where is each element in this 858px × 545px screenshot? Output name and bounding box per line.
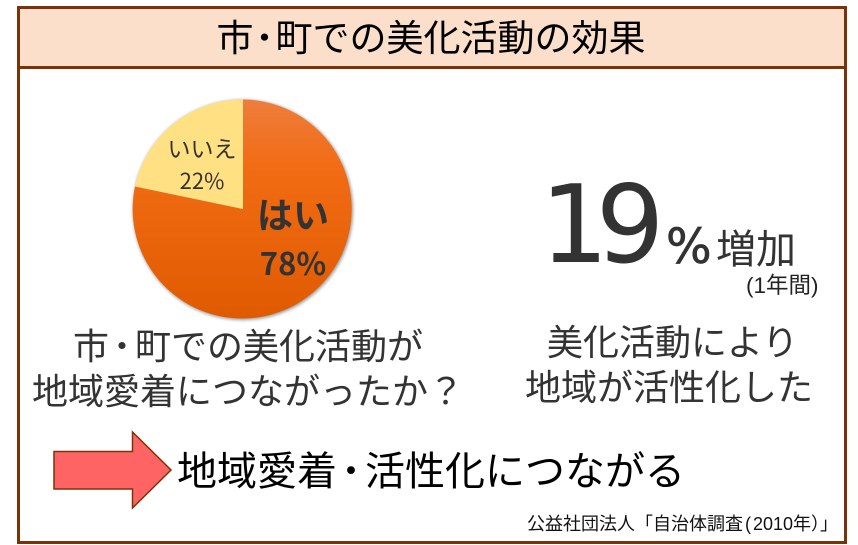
right result text: 地域が活性化した xyxy=(525,367,813,408)
left question text xyxy=(32,326,464,412)
right result text: 美化活動により xyxy=(547,322,798,363)
label: no: いいえ xyxy=(168,130,236,164)
left question text: 市 町での美化活動が xyxy=(73,326,423,367)
conclusion text: ･ xyxy=(341,450,361,494)
slice: yes 78% xyxy=(133,100,352,318)
left question text: 地域愛着につながったか？ xyxy=(32,371,464,412)
label: yes: 78% xyxy=(260,239,326,284)
conclusion text: 地域愛着 活性化につながる xyxy=(177,450,685,494)
left question text: ･ xyxy=(113,326,131,367)
source: 公益社団法人「自治体調査(2010年）」 xyxy=(527,514,838,534)
pie shadow xyxy=(133,100,353,320)
period note: (1年間) xyxy=(746,273,818,298)
label: no xyxy=(168,130,236,196)
slice: no 22% xyxy=(135,99,243,209)
header band xyxy=(17,6,847,69)
pie chart xyxy=(131,98,355,322)
number 19: 19 xyxy=(540,163,651,288)
percent increase: % xyxy=(666,219,712,275)
title: ･ xyxy=(255,18,274,59)
label: yes xyxy=(257,187,329,284)
title: 市 町での美化活動の効果 xyxy=(216,18,646,59)
big statistic xyxy=(540,163,818,298)
arrow xyxy=(53,430,172,510)
label: yes: はい xyxy=(257,187,329,239)
right result text xyxy=(525,322,813,408)
big statistic: 増加 xyxy=(716,228,796,272)
label: no: 22% xyxy=(180,164,224,196)
